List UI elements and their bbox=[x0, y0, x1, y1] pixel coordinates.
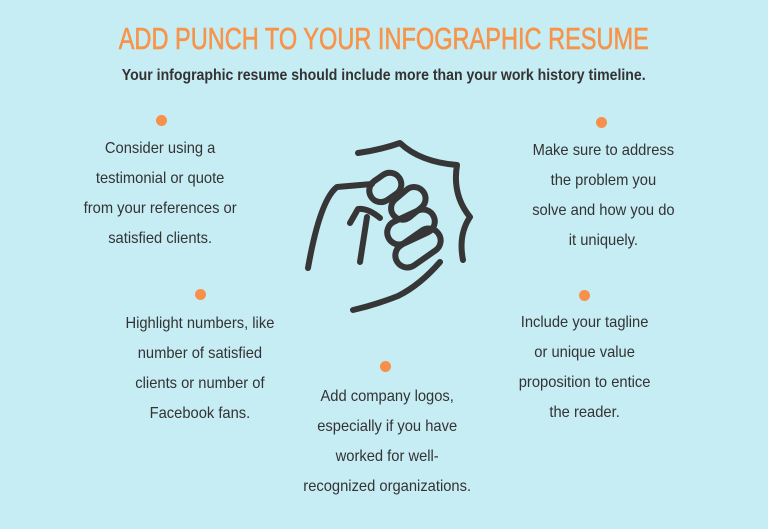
text: testimonial: from your references or bbox=[84, 200, 236, 217]
text: logos: especially if you have bbox=[317, 418, 457, 435]
text: logos: recognized organizations. bbox=[303, 478, 471, 495]
text: tagline bbox=[519, 314, 651, 421]
text: numbers: number of satisfied bbox=[138, 345, 262, 362]
title: ADD PUNCH TO YOUR INFOGRAPHIC RESUME bbox=[119, 21, 649, 56]
text: problem: the problem you bbox=[550, 172, 656, 189]
dot: top left bbox=[156, 115, 167, 126]
text: numbers: clients or number of bbox=[135, 375, 265, 392]
dot: top right bbox=[596, 117, 607, 128]
text: tagline: the reader. bbox=[550, 404, 620, 421]
text: problem bbox=[532, 142, 674, 249]
text: testimonial bbox=[84, 140, 236, 247]
dot: middle left bbox=[195, 289, 206, 300]
icon: fist bbox=[305, 140, 474, 313]
text: problem: solve and how you do bbox=[532, 202, 674, 219]
text: testimonial: Consider using a bbox=[105, 140, 215, 157]
text: numbers: Highlight numbers, like bbox=[126, 315, 274, 332]
text: problem: Make sure to address bbox=[532, 142, 674, 159]
text: logos: Add company logos, bbox=[320, 388, 454, 405]
subtitle: Your infographic resume should include more than your work history timeline. bbox=[122, 67, 646, 84]
text: tagline: proposition to entice bbox=[519, 374, 651, 391]
text: logos: worked for well- bbox=[335, 448, 439, 465]
text: numbers bbox=[126, 315, 274, 422]
text: numbers: Facebook fans. bbox=[150, 405, 250, 422]
text: testimonial: satisfied clients. bbox=[108, 230, 212, 247]
dot: bottom center bbox=[380, 361, 391, 372]
text: logos bbox=[303, 388, 471, 495]
text: tagline: or unique value bbox=[535, 344, 635, 361]
text: testimonial: testimonial or quote bbox=[96, 170, 224, 187]
text: tagline: Include your tagline bbox=[521, 314, 649, 331]
dot: middle right bbox=[579, 290, 590, 301]
text: problem: it uniquely. bbox=[568, 232, 638, 249]
